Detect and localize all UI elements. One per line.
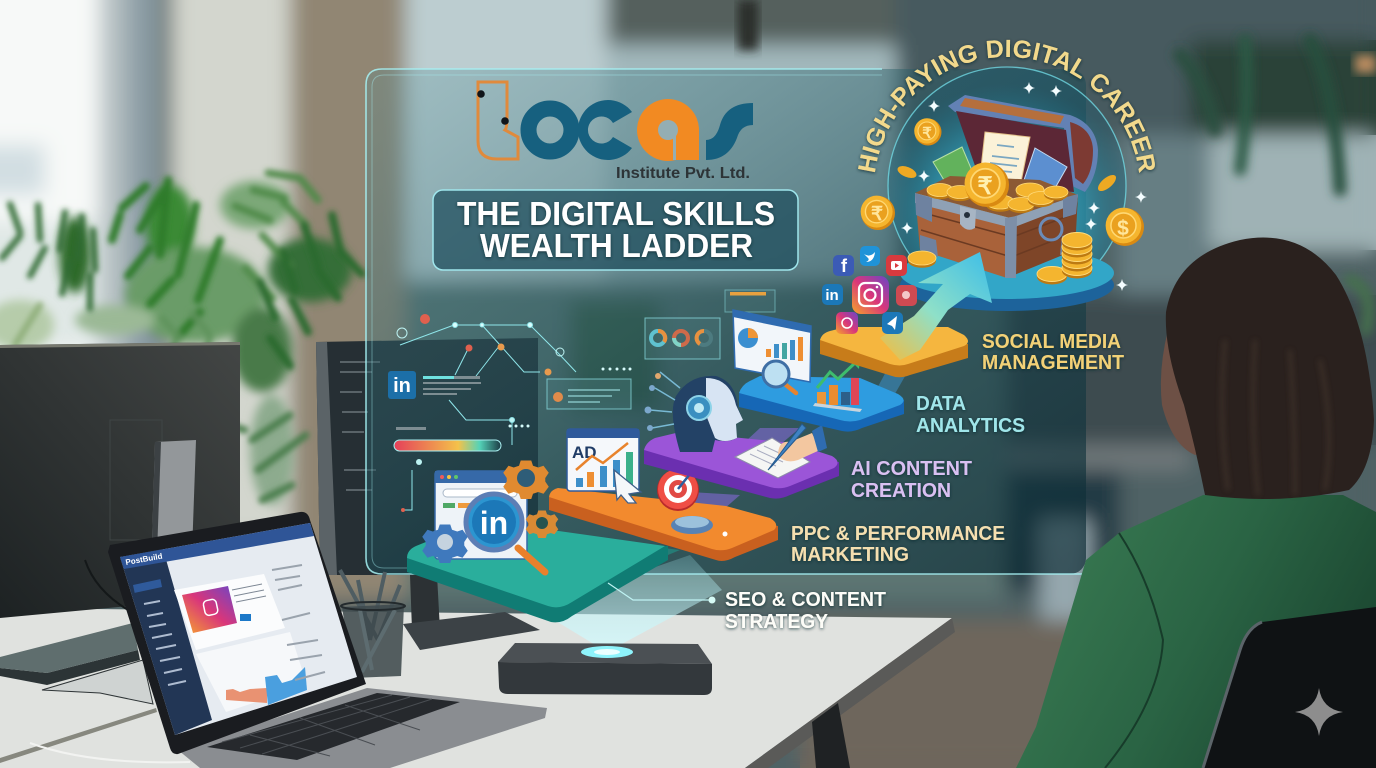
left monitor xyxy=(0,342,240,618)
seo browser window xyxy=(435,471,527,559)
instagram small xyxy=(836,312,858,334)
label: social media management: SOCIAL MEDIA xyxy=(982,330,1121,353)
red icon xyxy=(896,285,917,306)
laptop base xyxy=(178,688,547,768)
connector to seo label xyxy=(608,583,712,600)
hologram panel xyxy=(366,69,1086,574)
step 1: SEO platform xyxy=(407,460,668,622)
cursor xyxy=(614,470,641,503)
step 4: Data platform xyxy=(733,310,904,432)
hologram mini card xyxy=(547,379,631,409)
analytics chart on screen xyxy=(196,632,307,712)
label: ai content creation xyxy=(851,457,972,502)
ai head xyxy=(644,372,743,452)
sidebar of feed xyxy=(272,565,325,680)
ad window xyxy=(567,429,639,491)
magnifier with linkedin xyxy=(466,494,545,572)
hologram projector xyxy=(498,643,712,695)
label: ppc and performance marketing: PPC & PERFORMANCE xyxy=(791,522,1005,545)
hologram progress bar xyxy=(394,427,501,451)
floating coins: ₹ xyxy=(922,125,932,142)
floating coins xyxy=(861,118,1144,284)
logo xyxy=(477,82,753,182)
linkedin: in xyxy=(825,287,839,304)
step 3: AI platform xyxy=(644,372,839,499)
green banknote xyxy=(933,147,973,190)
laptop: PostBuild xyxy=(125,552,163,567)
small widget above dashboard xyxy=(725,290,775,312)
orange a xyxy=(637,99,699,161)
facebook: f xyxy=(841,256,848,276)
hologram LinkedIn card xyxy=(388,371,481,399)
label: data analytics xyxy=(916,392,1025,437)
pen holder xyxy=(340,570,405,678)
plant behind monitors xyxy=(0,173,362,505)
mouse xyxy=(671,516,728,536)
youtube xyxy=(886,255,907,276)
instagram post card xyxy=(174,574,285,650)
blue banknote xyxy=(1023,148,1067,197)
sparkles xyxy=(901,82,1147,291)
certificate xyxy=(980,132,1030,187)
chest rim and front xyxy=(915,176,1078,218)
curved heading: HIGH-PAYING DIGITAL CAREER xyxy=(856,39,1157,175)
gears xyxy=(422,460,558,563)
dashboard window xyxy=(733,310,811,382)
blue icon xyxy=(882,312,903,334)
hair xyxy=(1166,238,1374,499)
hologram donut widget xyxy=(645,318,720,359)
label: data analytics: ANALYTICS xyxy=(916,414,1025,437)
label: ai content creation: AI CONTENT xyxy=(851,457,972,480)
label: social media management xyxy=(982,330,1124,374)
label: seo and content strategy: STRATEGY xyxy=(725,610,828,633)
instagram large xyxy=(852,276,889,314)
cheek xyxy=(1161,330,1215,455)
target xyxy=(657,461,700,511)
step 2: PPC platform xyxy=(549,429,778,561)
chair xyxy=(1203,607,1376,768)
step 5: Social media platform xyxy=(820,327,968,377)
label: ppc and performance marketing: MARKETING xyxy=(791,543,909,566)
floating coins: $ xyxy=(1117,217,1129,240)
network diagram hologram xyxy=(397,314,632,512)
title box: THE DIGITAL SKILLS xyxy=(457,195,775,232)
treasure pedestal xyxy=(900,247,1114,311)
title box: WEALTH LADDER xyxy=(480,227,753,264)
jacket xyxy=(1016,495,1376,768)
woman seated xyxy=(1016,238,1376,768)
label: seo and content strategy xyxy=(708,588,886,633)
coin pile xyxy=(927,183,1068,213)
laptop xyxy=(108,512,547,768)
label: data analytics: DATA xyxy=(916,392,966,415)
left keyboard and monitor base xyxy=(0,560,190,762)
logo subtitle: Institute Pvt. Ltd. xyxy=(616,165,750,182)
treasure dome glow xyxy=(888,67,1126,305)
projector light beam xyxy=(508,555,722,652)
social media icons xyxy=(822,246,917,334)
treasure chest: ₹ xyxy=(977,173,993,200)
centre monitor xyxy=(316,338,540,650)
hologram LinkedIn card: in xyxy=(393,375,411,397)
laptop screen xyxy=(120,523,357,735)
label: ai content creation: CREATION xyxy=(851,479,951,502)
laptop lid xyxy=(108,512,366,754)
floating coins: ₹ xyxy=(871,204,883,225)
growth arrow xyxy=(880,252,992,360)
title box xyxy=(433,190,798,270)
bar chart with rising arrow xyxy=(813,358,862,412)
paper and writing hand xyxy=(735,424,827,478)
twitter xyxy=(860,246,880,266)
label: seo and content strategy: SEO & CONTENT xyxy=(725,588,886,611)
desk xyxy=(0,608,955,768)
icon: sparkle watermark xyxy=(1295,688,1343,736)
ladder connector ribbon xyxy=(520,350,920,600)
treasure chest xyxy=(915,95,1098,278)
dashboard magnifier xyxy=(763,361,796,393)
label: social media management: MANAGEMENT xyxy=(982,351,1124,374)
magnifier with linkedin: in xyxy=(480,505,508,541)
label: ppc and performance marketing xyxy=(791,522,1005,566)
right side blurred plants xyxy=(1180,40,1369,330)
ad window: AD xyxy=(572,443,597,462)
